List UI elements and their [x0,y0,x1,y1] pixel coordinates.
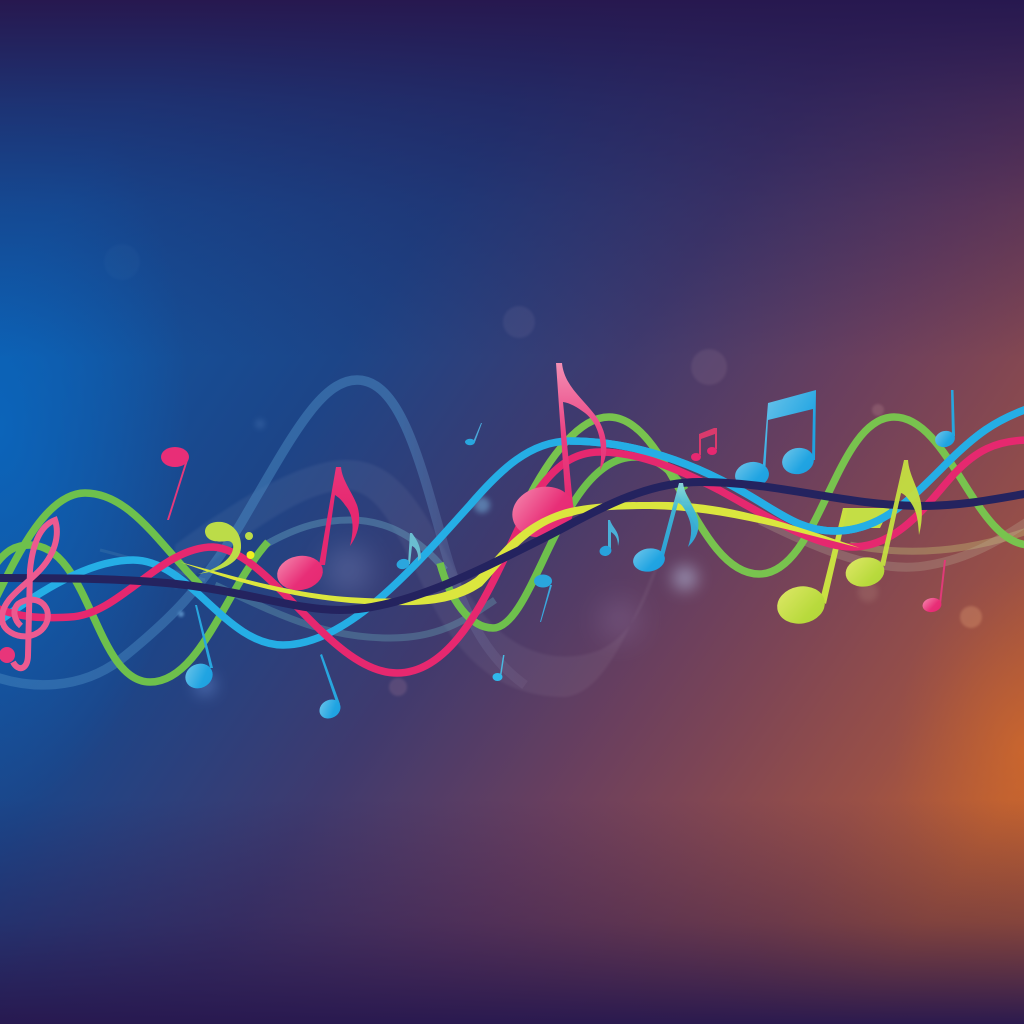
note: small pale beamed note [395,533,421,571]
stem [939,560,946,604]
big faint blue arch [0,380,525,685]
stem [195,605,213,668]
translucent background waves [0,380,1024,697]
note: small pink double note [691,428,717,461]
head [507,480,579,544]
green wave right [525,417,1024,574]
note: tiny blue note bottom [492,655,504,681]
faint grey ribbon [760,520,1024,567]
clef spiral [2,520,57,668]
head [181,659,217,693]
bokeh lights [104,244,982,696]
head [843,554,887,590]
note: blue note bottom [316,654,344,722]
stem and flags [408,533,421,564]
icon: bass clef [198,522,254,574]
stem and flag [880,460,922,566]
icon: treble clef [0,520,57,668]
faint teal lower wave [215,585,495,638]
note: blue note under centre green [534,574,552,622]
lower dot [246,551,254,559]
stem and flag [608,520,619,551]
green wave centre [440,457,685,628]
head left [691,453,701,461]
note: floating pink note [161,447,189,520]
stem [820,508,848,604]
green wave left low [0,542,268,682]
head [598,544,613,557]
head [631,546,667,574]
green wave left high [0,493,200,610]
yellow tapered ribbon [180,502,860,605]
note: tiny blue note top [465,423,482,445]
tail ball [0,647,15,663]
note: blue note lower left [181,605,217,693]
faint left swoosh [100,550,205,580]
note: small blue eighth note [598,520,619,557]
stem and flag [660,483,698,556]
blue wave overlap right [570,408,1024,531]
head [933,429,957,449]
wide pale lens wave [175,460,670,697]
head [921,596,943,614]
head [465,439,475,445]
note: lime double note lower head [774,508,890,627]
note: lime eighth note [843,460,922,590]
faint teal upper wave [265,520,445,570]
head [774,583,828,627]
stem [167,460,188,520]
clef body [198,522,241,574]
blue wave [0,408,1024,645]
stem [473,423,482,442]
note: small pink note right [921,560,946,614]
head [161,447,189,467]
head [316,696,344,722]
stem [951,390,955,438]
faint gold ribbon [850,530,1024,551]
head [534,574,552,588]
note: blue double note [733,390,816,490]
head [274,552,326,594]
green waves [0,417,1024,682]
stem [500,655,504,678]
head [492,673,502,681]
stem [320,654,340,705]
head right [707,447,717,455]
beam and stems [762,390,816,476]
upper dot [245,532,253,540]
pink wave [0,440,1024,673]
stem and flag [556,363,606,508]
head left [733,460,771,490]
navy wave [0,482,1024,610]
beam [839,508,890,528]
note: blue eighth note with teal flag [631,483,698,574]
beam and stems [699,428,717,455]
note: small blue note top right [933,390,957,449]
stem [540,585,552,622]
note: medium pink eighth note [274,467,359,594]
head right [780,445,816,477]
stem and flag [319,467,359,565]
note: big pink eighth note [507,363,606,544]
head [395,557,411,571]
